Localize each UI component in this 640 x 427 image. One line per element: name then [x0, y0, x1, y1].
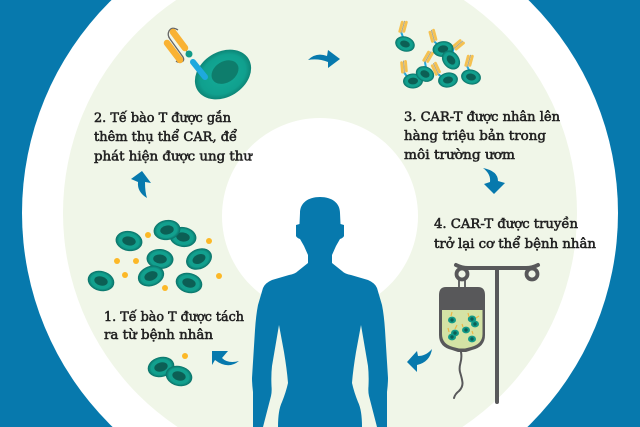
arrow: patient to step 1 [212, 351, 239, 365]
cells in bag [448, 312, 479, 342]
yellow dots [114, 232, 222, 291]
step 2: T cell with CAR receptor [167, 28, 260, 109]
step 3 text: môi trường ươm [404, 148, 515, 163]
arrow: step 1 to step 2 [131, 171, 151, 198]
step 3 text [404, 110, 561, 163]
step 1: T cells and dots [85, 218, 222, 296]
IV tube [454, 352, 462, 398]
step 2 text [94, 110, 253, 164]
liquid [442, 310, 482, 348]
CAR-T cell bodies [393, 34, 482, 89]
white centre circle [222, 118, 418, 314]
step 3 text: hàng triệu bản trong [404, 129, 546, 144]
step 1 text: 1. Tế bào T được tách [104, 309, 245, 325]
receptor arms [400, 21, 472, 75]
step 2 text: phát hiện được ung thư [94, 150, 253, 164]
step 1: cells below text [145, 353, 195, 389]
step 3 text: 3. CAR-T được nhân lên [404, 110, 561, 125]
step 1 text [104, 309, 245, 343]
step 1 text: ra từ bệnh nhân [104, 328, 214, 343]
receptor stems [401, 33, 470, 78]
step 3: multiplied CAR-T cells [393, 21, 482, 89]
step 2 text: thêm thụ thể CAR, để [94, 129, 237, 145]
IV stand and bag [439, 265, 538, 402]
IV bag [439, 287, 485, 352]
patient silhouette [252, 197, 388, 427]
step 2 text: 2. Tế bào T được gắn [94, 110, 232, 126]
step 4 text: 4. CAR-T được truyền [434, 216, 579, 232]
arrow: step 4 to patient [407, 349, 432, 372]
arrow: step 3 to step 4 [483, 168, 505, 194]
arrow: step 2 to step 3 [308, 50, 340, 68]
T cell body [186, 40, 260, 109]
T cells [114, 229, 144, 253]
step 4 text: trở lại cơ thể bệnh nhân [434, 236, 597, 252]
step 4 text [434, 216, 597, 252]
hanger rings [456, 268, 468, 280]
IV pole [456, 265, 538, 402]
CAR receptor stem [193, 62, 205, 77]
CAR antibody arms [168, 28, 184, 62]
